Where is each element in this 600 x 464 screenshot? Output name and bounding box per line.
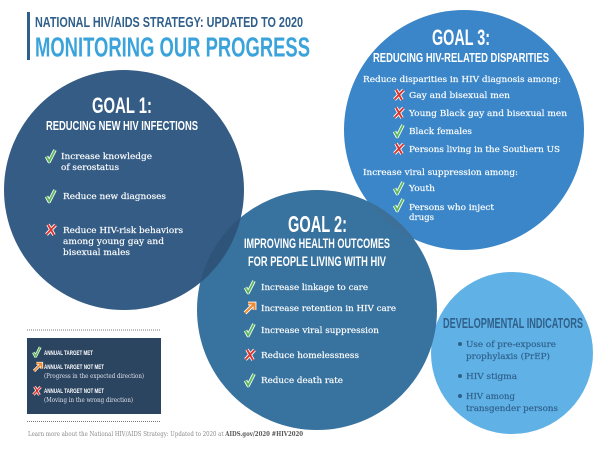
- legend: wrong direction: ANNUAL TARGET NOT MET: [44, 388, 104, 395]
- goal 3 list: Gay and bisexual men: [409, 90, 511, 100]
- panel: goal 1: [4, 70, 244, 310]
- goal 3 list: [363, 74, 568, 222]
- goal 2 list: Reduce homelessness: [261, 350, 359, 360]
- goal 1 heading: [46, 93, 198, 133]
- legend: wrong direction: [33, 387, 133, 404]
- panel: goal 3: [344, 10, 584, 250]
- goal 1 heading: REDUCING NEW HIV INFECTIONS: [46, 119, 198, 133]
- goal 3 list: Persons who inject: [409, 202, 495, 212]
- goal 2 list: [245, 281, 396, 386]
- goal 3 list: Young Black gay and bisexual men: [408, 108, 568, 118]
- panel: goal 2: [197, 190, 437, 430]
- developmental indicators list: prophylaxis (PrEP): [466, 351, 550, 361]
- goal 1 list: Increase knowledge: [61, 151, 152, 161]
- goal 2 heading: GOAL 2:: [288, 211, 347, 237]
- goal 3 list: Reduce disparities in HIV diagnosis among:: [363, 74, 561, 84]
- legend: progress in expected direction: (Progress in the expected direction): [44, 373, 144, 380]
- goal 1 list: Reduce HIV-risk behaviors: [63, 225, 183, 235]
- developmental indicators list: Use of pre-exposure: [466, 339, 556, 349]
- title block: NATIONAL HIV/AIDS STRATEGY: UPDATED TO 2020: [35, 14, 303, 31]
- developmental indicators list: HIV among: [466, 391, 516, 401]
- legend: progress in expected direction: ANNUAL TARGET NOT MET: [44, 364, 104, 371]
- developmental indicators list: HIV stigma: [466, 371, 517, 381]
- goal 1 list: among young gay and: [63, 236, 165, 246]
- goal 1 list: [46, 150, 183, 257]
- goal 1 list: bisexual males: [63, 247, 130, 257]
- title block: [27, 12, 310, 62]
- goal 2 heading: IMPROVING HEALTH OUTCOMES: [244, 236, 390, 251]
- legend panel: [27, 338, 161, 414]
- panel: developmental indicators: [431, 272, 593, 434]
- goal 3 list: Black females: [409, 126, 472, 136]
- title block: MONITORING OUR PROGRESS: [35, 32, 310, 62]
- goal 3 list: Increase viral suppression among:: [363, 167, 518, 177]
- goal 2 list: Increase linkage to care: [261, 282, 368, 292]
- footer note: Learn more about the National HIV/AIDS Strategy: Updated to 2020 at AIDS.gov/2020 #HIV2020: [28, 431, 303, 438]
- developmental indicators list: transgender persons: [466, 403, 558, 413]
- legend: target met: ANNUAL TARGET MET: [44, 350, 93, 357]
- goal 1 list: of serostatus: [61, 162, 119, 172]
- goal 3 list: drugs: [409, 212, 434, 222]
- developmental indicators list: [458, 339, 558, 413]
- goal 3 list: Persons living in the Southern US: [409, 144, 560, 154]
- goal 2 heading: FOR PEOPLE LIVING WITH HIV: [248, 254, 386, 269]
- goal 1 list: Reduce new diagnoses: [63, 191, 166, 201]
- goal 2 list: Increase retention in HIV care: [261, 303, 396, 313]
- legend: progress in expected direction: [34, 363, 144, 380]
- goal 3 heading: [373, 25, 549, 65]
- goal 3 heading: GOAL 3:: [432, 25, 490, 50]
- overlap goal 1 and goal 2: [200, 218, 241, 283]
- legend: wrong direction: (Moving in the wrong direction): [44, 397, 133, 404]
- goal 2 heading: [244, 211, 390, 269]
- goal 2 list: Increase viral suppression: [261, 325, 380, 335]
- overlap goal 2 and goal 3: [368, 201, 414, 238]
- goal 1 heading: GOAL 1:: [92, 93, 152, 118]
- goal 3 list: Youth: [408, 183, 436, 193]
- goal 2 list: Reduce death rate: [261, 375, 343, 385]
